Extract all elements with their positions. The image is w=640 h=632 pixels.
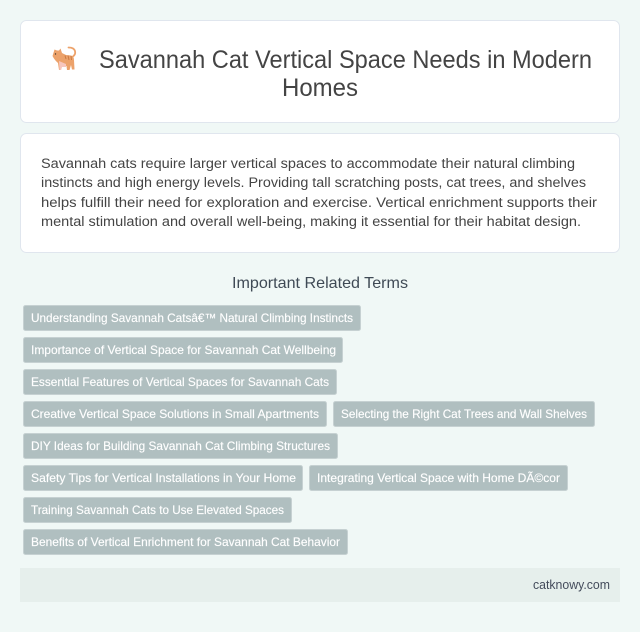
tag 9: Training Savannah Cats to Use Elevated Spaces <box>31 503 284 517</box>
title: Savannah Cat Vertical Space Needs in Modern <box>99 46 592 74</box>
tag 9 <box>24 498 292 522</box>
tag 10: Benefits of Vertical Enrichment for Savannah Cat Behavior <box>31 535 340 549</box>
tag 2: Importance of Vertical Space for Savannah Cat Wellbeing <box>31 343 336 357</box>
text block: description: instincts and high energy levels. Providing tall scratching posts, cat trees, and shelves <box>41 175 586 191</box>
heading: related terms: Important Related Terms <box>232 275 408 292</box>
tag 6: DIY Ideas for Building Savannah Cat Climbing Structures <box>31 439 330 453</box>
footer: catknowy.com <box>533 578 610 592</box>
tag 2 <box>24 338 342 362</box>
panel: description <box>20 134 620 252</box>
tags <box>24 306 594 554</box>
tag 7: Safety Tips for Vertical Installations in Your Home <box>31 471 296 485</box>
tag 3: Essential Features of Vertical Spaces for Savannah Cats <box>31 375 329 389</box>
footer <box>20 568 620 602</box>
title <box>99 46 592 102</box>
panel: title card <box>20 20 620 122</box>
tag 10 <box>24 530 348 554</box>
tag 4: Creative Vertical Space Solutions in Small Apartments <box>31 407 319 421</box>
text block: description <box>41 156 597 230</box>
title: Homes <box>282 74 358 102</box>
tag 8 <box>310 466 568 490</box>
tag 1 <box>24 306 360 330</box>
text block: description: mental stimulation and overall well-being, making it essential for their habitat design. <box>41 214 581 230</box>
tag 5: Selecting the Right Cat Trees and Wall Shelves <box>341 407 587 421</box>
tag 1: Understanding Savannah Catsâ€™ Natural Climbing Instincts <box>31 311 353 325</box>
text block: description: helps fulfill their need for exploration and exercise. Vertical enrichment supports their <box>41 195 597 211</box>
tag 3 <box>24 370 336 394</box>
icon: cat <box>52 48 75 70</box>
tag 7 <box>24 466 302 490</box>
tag 5 <box>334 402 594 426</box>
tag 6 <box>24 434 338 458</box>
tag 4 <box>24 402 326 426</box>
tag 8: Integrating Vertical Space with Home DÃ©cor <box>317 471 560 485</box>
text block: description: Savannah cats require larger vertical spaces to accommodate their natural climbing <box>41 156 575 172</box>
